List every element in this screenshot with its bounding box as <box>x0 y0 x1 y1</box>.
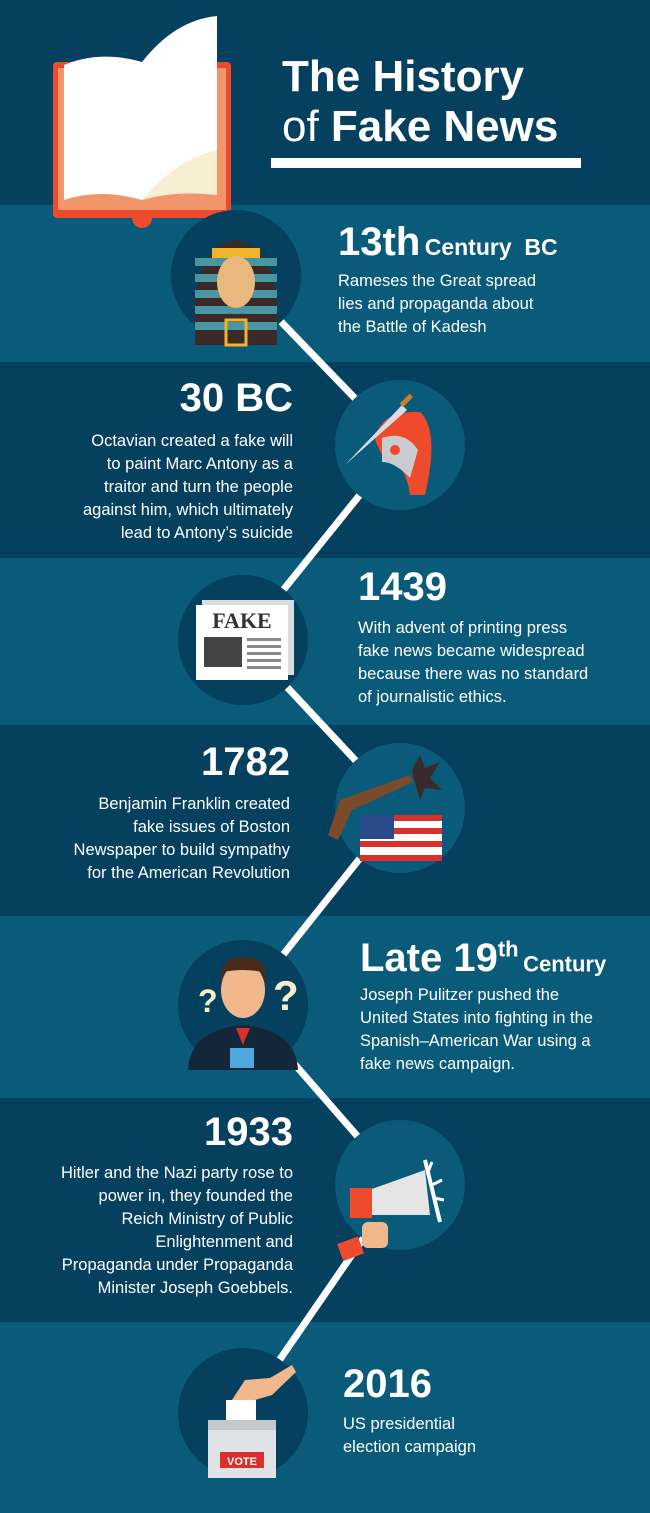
text: 13th century BC <box>338 220 558 336</box>
text: 2016: election campaign <box>343 1438 476 1456</box>
text: 1439: 1439 <box>358 565 447 609</box>
title underline <box>271 158 581 168</box>
text: 2016: 2016 <box>343 1362 432 1406</box>
circle: vote box: VOTE <box>227 1456 257 1468</box>
text: 30 BC: to paint Marc Antony as a <box>107 455 293 473</box>
circle: man with question marks: ? <box>198 983 218 1019</box>
band: 2016 <box>0 1322 650 1513</box>
text: late 19th century: Spanish–American War using a <box>360 1032 591 1050</box>
text: 1933: Propaganda under Propaganda <box>62 1256 293 1274</box>
text: 1439: With advent of printing press <box>358 619 567 637</box>
text: late 19th century <box>360 936 606 1073</box>
text: late 19th century: fake news campaign. <box>360 1055 515 1073</box>
text: 1933: power in, they founded the <box>99 1187 293 1205</box>
band: 1782 <box>0 725 650 916</box>
text: 1933 <box>61 1110 294 1297</box>
text: 1782 <box>74 740 290 882</box>
text: 13th century BC: Rameses the Great spread <box>338 272 536 290</box>
text: late 19th century: Late 19th Century <box>360 936 606 980</box>
text: 1782: 1782 <box>201 740 290 784</box>
title: The History <box>282 52 524 101</box>
text: 1439: because there was no standard <box>358 665 588 683</box>
text: 2016 <box>343 1362 476 1456</box>
text: 1782: for the American Revolution <box>87 864 290 882</box>
circle: megaphone <box>335 1120 465 1261</box>
circle: vote box <box>178 1348 308 1478</box>
circle: spartan helmet <box>335 380 465 510</box>
text: 2016: US presidential <box>343 1415 455 1433</box>
text: 30 BC: Octavian created a fake will <box>91 432 293 450</box>
text: 1439: of journalistic ethics. <box>358 688 507 706</box>
band: late 19th <box>0 916 650 1098</box>
text: 1933: Enlightenment and <box>155 1233 293 1251</box>
text: 30 BC: against him, which ultimately <box>83 501 293 519</box>
band: 30 BC <box>0 362 650 558</box>
text: 1439 <box>358 565 588 706</box>
text: 1933: Hitler and the Nazi party rose to <box>61 1164 293 1182</box>
text: 30 BC <box>83 376 293 542</box>
circle: man with question marks: ? <box>273 972 299 1019</box>
band: header <box>0 0 650 205</box>
text: 1782: Benjamin Franklin created <box>98 795 290 813</box>
circle: fake newspaper: FAKE <box>212 608 272 633</box>
text: late 19th century: United States into fighting in the <box>360 1009 593 1027</box>
text: 30 BC: 30 BC <box>180 376 293 420</box>
icon: book <box>53 16 231 228</box>
circle: fake newspaper <box>178 575 308 705</box>
band: 1439 <box>0 558 650 725</box>
circle: musket and flag <box>328 743 465 873</box>
text: 13th century BC: the Battle of Kadesh <box>338 318 487 336</box>
text: 13th century BC: lies and propaganda about <box>338 295 533 313</box>
circle: man with question marks <box>178 940 308 1070</box>
text: 1782: fake issues of Boston <box>133 818 290 836</box>
text: 1782: Newspaper to build sympathy <box>74 841 290 859</box>
text: 30 BC: traitor and turn the people <box>104 478 293 496</box>
text: 1933: Reich Ministry of Public <box>122 1210 293 1228</box>
text: 30 BC: lead to Antony’s suicide <box>121 524 293 542</box>
text: 13th century BC: 13th Century BC <box>338 220 558 264</box>
text: 1933: Minister Joseph Goebbels. <box>98 1279 293 1297</box>
band: 13th century <box>0 205 650 362</box>
text: 1439: fake news became widespread <box>358 642 585 660</box>
timeline line <box>236 275 400 1413</box>
text: of Fake News <box>282 102 558 151</box>
text: 1933: 1933 <box>204 1110 293 1154</box>
text: late 19th century: Joseph Pulitzer pushed the <box>360 986 559 1004</box>
circle: pharaoh <box>171 210 301 345</box>
band: 1933 <box>0 1098 650 1322</box>
